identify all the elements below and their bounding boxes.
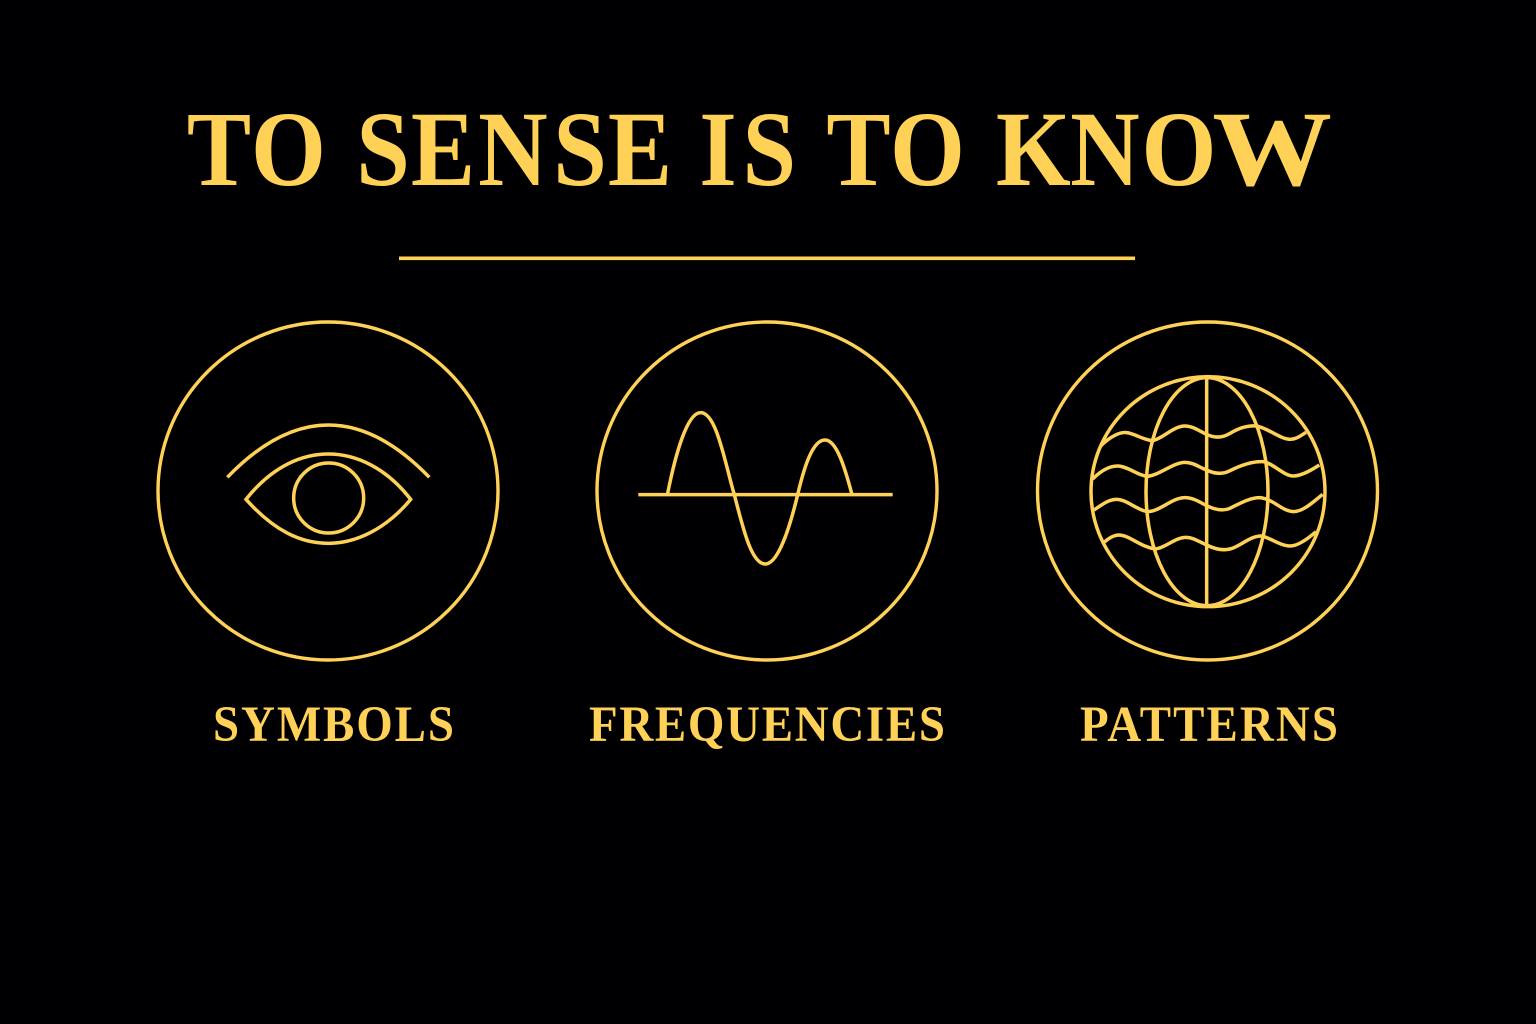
icon: globe xyxy=(1091,377,1325,607)
label: symbols: SYMBOLS xyxy=(213,695,454,752)
label: frequencies: FREQUENCIES xyxy=(589,695,945,752)
panel: patterns xyxy=(1038,322,1378,752)
panel: symbols xyxy=(158,322,498,752)
panel: frequencies xyxy=(589,322,945,752)
label: patterns: PATTERNS xyxy=(1080,695,1338,752)
title: W xyxy=(1212,90,1332,209)
symbols ring xyxy=(158,322,498,660)
frequencies ring xyxy=(597,322,937,660)
title: TO SENSE IS TO KNO xyxy=(187,90,1216,209)
icon: eye xyxy=(227,425,429,543)
divider under title xyxy=(399,256,1135,260)
patterns ring xyxy=(1038,322,1378,660)
icon: waveform xyxy=(638,413,893,564)
